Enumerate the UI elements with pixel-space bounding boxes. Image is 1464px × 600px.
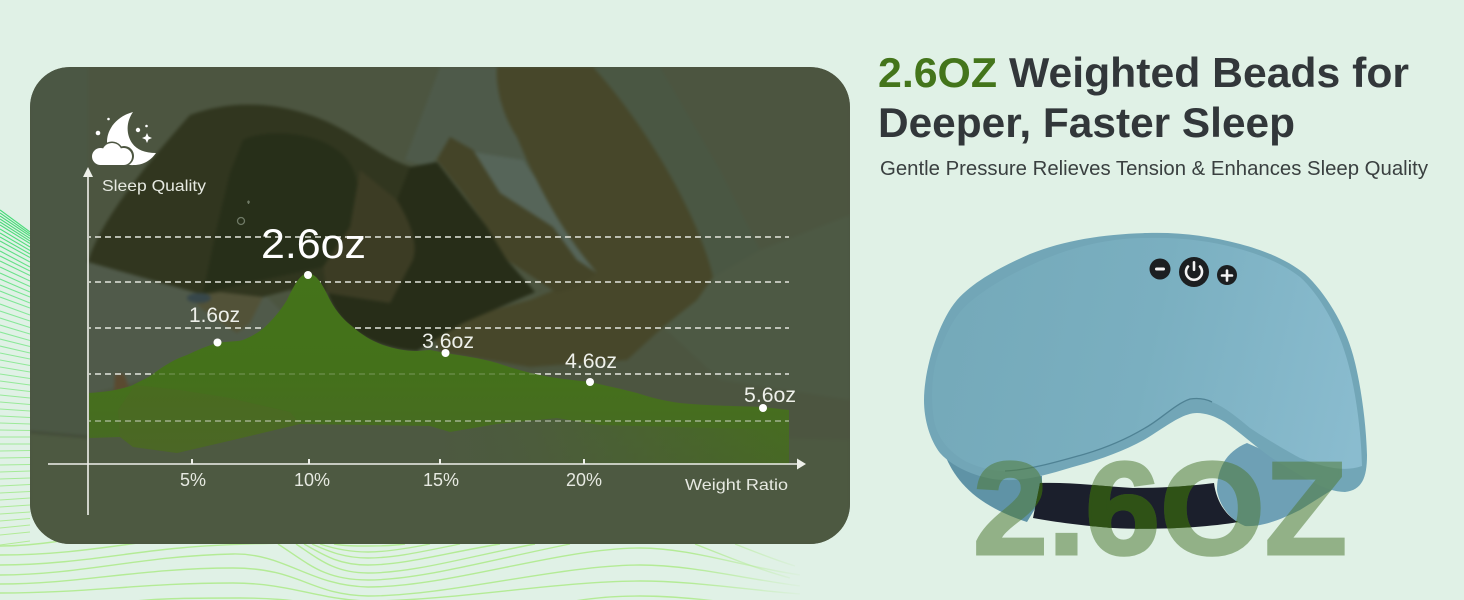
photo: darkened sleeping woman	[30, 67, 850, 544]
small controls on the worn mask	[238, 200, 250, 224]
axes	[48, 167, 806, 515]
x axis tick labels: 10%	[294, 470, 330, 490]
product: blue sleep mask	[924, 233, 1367, 529]
wave lines: left side	[0, 210, 30, 545]
data points and weight labels: 1.6oz	[189, 304, 240, 327]
heading: Deeper, Faster Sleep	[878, 99, 1295, 146]
control buttons	[1150, 257, 1237, 287]
data points and weight labels: 4.6oz	[565, 350, 617, 373]
panel: sleep quality chart over photo	[30, 67, 850, 544]
subheading: Gentle Pressure Relieves Tension & Enhances Sleep Quality	[880, 157, 1429, 180]
piping seam	[1005, 398, 1212, 471]
area chart: sleep quality curve	[89, 273, 789, 464]
axis label: weight ratio: Weight Ratio	[685, 477, 788, 494]
icon: moon and cloud	[90, 112, 156, 166]
watermark: 2.6OZ: 2.6OZ	[973, 435, 1347, 582]
data points and weight labels: 5.6oz	[744, 384, 796, 407]
heading: 2.6OZ	[878, 49, 997, 96]
left rear edge of mask	[945, 455, 1042, 522]
x axis tick labels: 20%	[566, 470, 602, 490]
mask front face	[932, 238, 1362, 471]
data points and weight labels: 2.6oz	[261, 220, 366, 267]
watermark: 2.6OZ: 2.6OZ	[973, 435, 1347, 582]
wave lines: bottom band	[0, 540, 800, 600]
watermark: 2.6OZ	[976, 460, 1345, 557]
mask outer edge	[924, 233, 1367, 492]
heading	[878, 49, 1409, 146]
x axis tick labels	[180, 470, 602, 490]
data points and weight labels	[189, 220, 796, 412]
x axis tick labels: 15%	[423, 470, 459, 490]
x axis tick labels: 5%	[180, 470, 206, 490]
right rear pad	[1217, 443, 1335, 526]
elastic strap	[1033, 483, 1238, 529]
heading: Weighted Beads for	[1009, 49, 1409, 96]
axis label: sleep quality: Sleep Quality	[102, 178, 206, 195]
grid lines	[89, 237, 789, 421]
data points and weight labels: 3.6oz	[422, 330, 474, 353]
